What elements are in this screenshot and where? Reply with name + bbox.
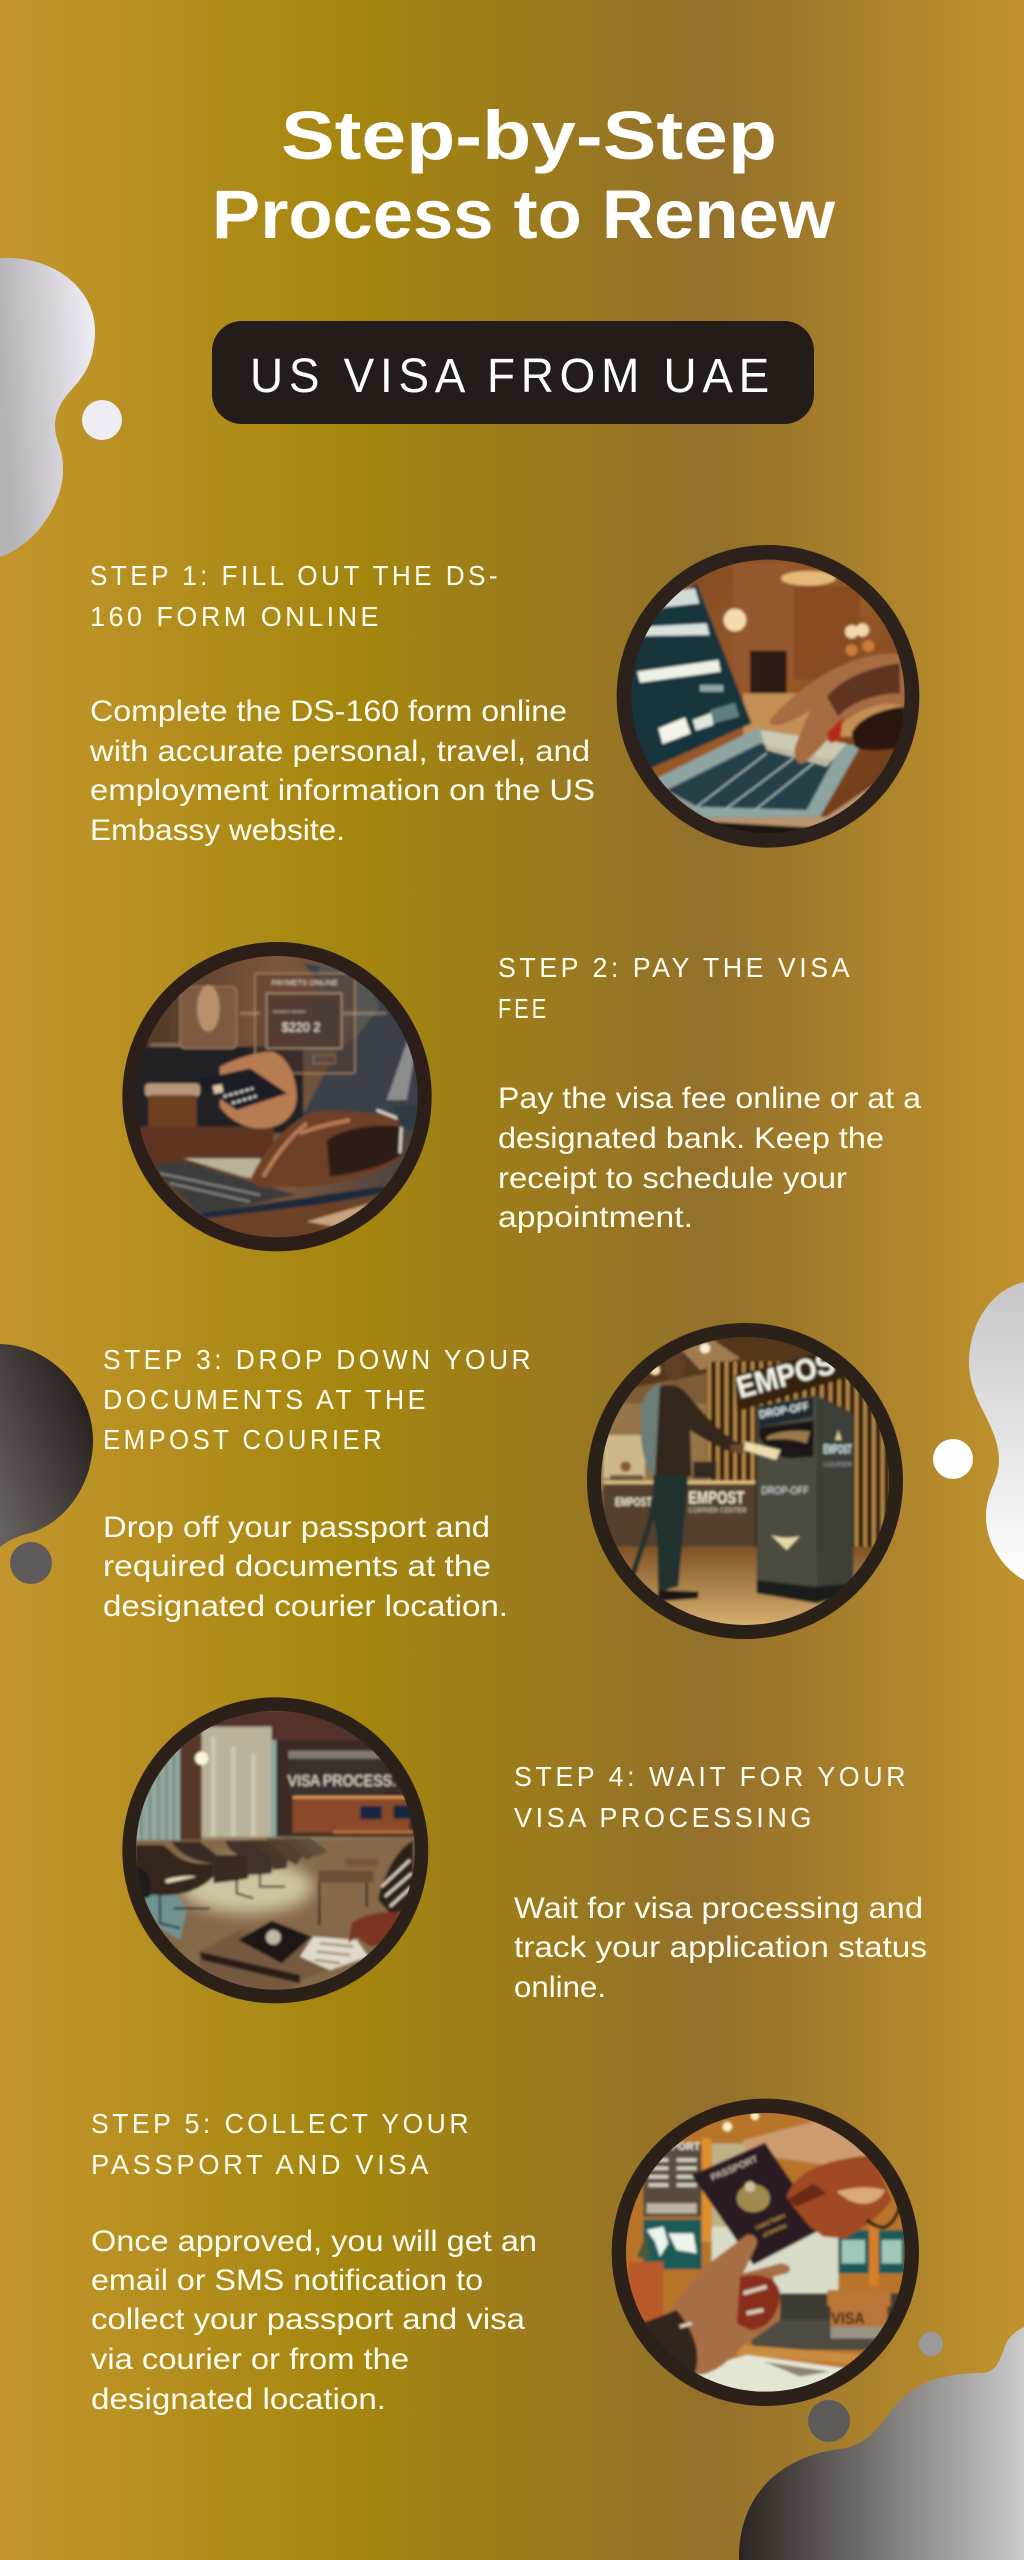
step 5 photo: passport handover: PASSPORT xyxy=(709,2154,760,2183)
step 3 heading: DOCUMENTS AT THE xyxy=(103,1384,429,1415)
step 3 body text xyxy=(103,1511,508,1623)
step 2 photo: paying with credit card: PAYMENT GATWAY xyxy=(273,1010,306,1014)
step 3 body text: Drop off your passport and xyxy=(103,1511,490,1544)
step 5 photo: passport handover: VISA xyxy=(831,2309,865,2328)
step 5 photo: passport handover xyxy=(612,2099,919,2406)
step 4 heading xyxy=(514,1761,909,1833)
decorative blob: left middle xyxy=(0,1344,93,1584)
title: Step-by-Step xyxy=(281,97,777,174)
step 1 body text: employment information on the US xyxy=(90,774,595,807)
step 1 body text: Embassy website. xyxy=(90,814,345,847)
step 1 panel xyxy=(89,543,919,850)
step 3 photo: Empost drop-off box: DROP-OFF xyxy=(758,1401,810,1421)
step 4 panel xyxy=(122,1697,927,2004)
step 3 body text: required documents at the xyxy=(103,1550,491,1583)
step 1 body text xyxy=(89,695,595,847)
step 3 photo: Empost drop-off box: EMPOST xyxy=(615,1495,652,1509)
step 2 heading xyxy=(498,952,853,1024)
step 2 heading: FEE xyxy=(498,993,549,1024)
step 4 body text xyxy=(514,1892,927,2004)
step 3 photo: Empost drop-off box: EMPOST xyxy=(823,1442,852,1456)
step 5 heading: PASSPORT AND VISA xyxy=(91,2149,432,2180)
step 2 body text: designated bank. Keep the xyxy=(498,1122,884,1155)
step 5 panel xyxy=(91,2099,919,2416)
step 5 heading: STEP 5: COLLECT YOUR xyxy=(91,2108,472,2139)
step 2 photo: paying with credit card: PAYMETS ONLINE xyxy=(272,978,338,987)
step 5 body text: Once approved, you will get an xyxy=(91,2225,537,2258)
subtitle pill: US VISA FROM UAE xyxy=(250,350,775,403)
step 4 body text: track your application status xyxy=(514,1931,927,1964)
step 5 body text: collect your passport and visa xyxy=(91,2303,526,2336)
step 3 heading: EMPOST COURIER xyxy=(103,1424,385,1455)
step 1 body text: with accurate personal, travel, and xyxy=(89,735,590,768)
step 3 heading: STEP 3: DROP DOWN YOUR xyxy=(103,1344,534,1375)
title xyxy=(212,97,835,253)
step 3 heading xyxy=(103,1344,534,1455)
step 3 panel xyxy=(103,1323,903,1639)
decorative blob: right middle xyxy=(933,1282,1024,1580)
step 4 heading: STEP 4: WAIT FOR YOUR xyxy=(514,1761,909,1792)
step 5 body text xyxy=(91,2225,537,2416)
title: Process to Renew xyxy=(212,176,835,253)
step 3 photo: Empost drop-off box: COURIER xyxy=(823,1462,852,1469)
step 5 body text: email or SMS notification to xyxy=(91,2264,483,2297)
step 2 body text: receipt to schedule your xyxy=(498,1162,847,1195)
subtitle pill xyxy=(212,321,814,424)
step 2 panel xyxy=(122,942,922,1251)
step 5 body text: designated location. xyxy=(91,2383,386,2416)
step 1 body text: Complete the DS-160 form online xyxy=(90,695,567,728)
step 1 heading: 160 FORM ONLINE xyxy=(90,601,382,632)
step 1 photo: hand typing on laptop xyxy=(613,543,919,850)
step 4 photo: visa processing waiting room: VISA PROCESS. xyxy=(288,1773,396,1790)
step 1 heading: STEP 1: FILL OUT THE DS- xyxy=(90,560,501,591)
step 3 photo: Empost drop-off box: CORRIER CENTER xyxy=(688,1506,747,1515)
step 2 body text: appointment. xyxy=(498,1201,693,1234)
step 1 heading xyxy=(90,560,501,632)
step 2 heading: STEP 2: PAY THE VISA xyxy=(498,952,853,983)
step 2 photo: paying with credit card xyxy=(122,942,432,1251)
decorative blob: top left xyxy=(0,258,122,557)
step 5 photo: passport handover: of America xyxy=(762,2223,788,2239)
step 3 photo: Empost drop-off box: DROP-OFF xyxy=(761,1485,809,1497)
step 5 photo: passport handover: United States xyxy=(755,2213,786,2232)
step 3 photo: Empost drop-off box xyxy=(587,1323,903,1639)
decorative blob: bottom right xyxy=(739,2327,1024,2560)
step 4 body text: online. xyxy=(514,1971,606,2004)
step 4 photo: visa processing waiting room xyxy=(122,1697,428,2003)
step 2 photo: paying with credit card: $220 2 xyxy=(282,1021,320,1035)
step 5 body text: via courier or from the xyxy=(91,2343,409,2376)
step 4 heading: VISA PROCESSING xyxy=(514,1802,815,1833)
step 3 photo: Empost drop-off box: EMPOS xyxy=(733,1346,838,1405)
step 3 body text: designated courier location. xyxy=(103,1590,508,1623)
step 4 body text: Wait for visa processing and xyxy=(514,1892,923,1925)
step 2 body text xyxy=(498,1082,922,1234)
step 3 photo: Empost drop-off box: EMPOST xyxy=(688,1487,745,1507)
step 5 heading xyxy=(91,2108,472,2180)
step 5 photo: passport handover: PORT xyxy=(671,2141,701,2153)
step 2 body text: Pay the visa fee online or at a xyxy=(498,1082,922,1115)
